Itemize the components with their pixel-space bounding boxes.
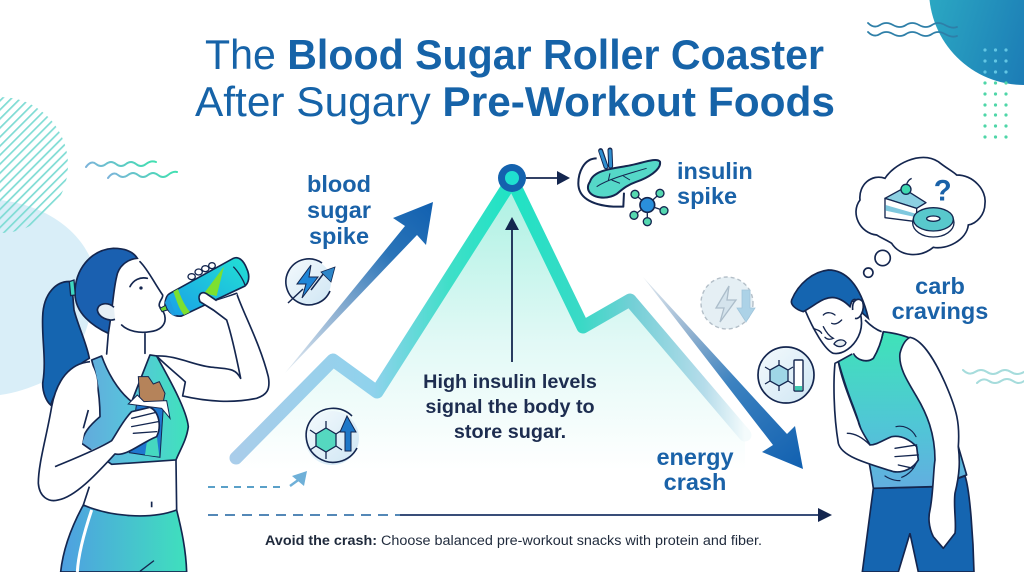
icon: hexagon with up arrow <box>305 408 359 465</box>
right arm <box>900 337 959 548</box>
eye <box>130 278 147 290</box>
head <box>805 296 861 354</box>
label: blood sugar spike: spike <box>309 223 369 249</box>
raised arm <box>157 293 269 401</box>
chocolate bar <box>128 377 170 457</box>
label: insulin spike: spike <box>677 183 737 209</box>
title: The Blood Sugar Roller Coaster <box>205 31 824 78</box>
decorative waves left <box>86 161 177 178</box>
title: After Sugary Pre-Workout Foods <box>195 78 835 125</box>
left arm and hand <box>38 362 159 501</box>
label: blood sugar spike: sugar <box>307 197 371 223</box>
left arm and hand <box>834 362 918 472</box>
icon: hexagon with low battery <box>758 347 814 403</box>
vertical arrow from text to peak <box>505 217 519 362</box>
dashed arrow upper <box>208 471 307 487</box>
finger lines <box>132 413 158 433</box>
glucose curve line <box>236 180 745 458</box>
waist lines <box>83 460 177 510</box>
hair <box>75 248 137 333</box>
dot grid top right <box>983 48 1008 139</box>
decorative waves top right <box>868 23 957 37</box>
hair <box>791 270 868 318</box>
pants <box>862 476 974 572</box>
blood sugar spike arrow <box>285 202 433 373</box>
icon: cake <box>885 178 926 222</box>
tank top <box>838 332 967 488</box>
timeline arrow lower <box>208 508 832 522</box>
label: energy crash: energy <box>656 444 734 470</box>
background blob: pale blue <box>0 200 94 395</box>
peak node <box>498 164 526 192</box>
figure: man with stomach ache and thought bubble <box>791 157 985 572</box>
background striped circle <box>0 97 68 233</box>
label: carb cravings: cravings <box>892 298 988 324</box>
ponytail <box>43 282 89 405</box>
ear <box>97 304 115 320</box>
icon: donut <box>913 208 954 237</box>
icon: pancreas and insulin molecule <box>578 150 668 226</box>
top-right gradient circle <box>929 0 1024 85</box>
label: insulin spike: insulin <box>677 158 753 184</box>
glucose curve area fill <box>236 180 745 480</box>
explanation text: High insulin levels <box>423 371 597 393</box>
arrow to pancreas <box>526 171 570 185</box>
explanation text: store sugar. <box>454 421 566 443</box>
thought cloud <box>856 157 985 277</box>
title <box>195 31 835 125</box>
icon: bolt with up arrow <box>285 259 335 305</box>
explanation text: signal the body to <box>425 396 595 418</box>
left arm outlines <box>38 362 159 501</box>
energy crash arrow <box>643 277 803 469</box>
ear <box>853 299 863 318</box>
decorative waves right <box>963 370 1024 383</box>
icon: faded bolt with down arrow <box>701 277 755 329</box>
torso <box>83 330 187 510</box>
neck lines <box>853 320 883 361</box>
label: carb cravings: carb <box>915 273 965 299</box>
figure: woman drinking <box>38 248 269 572</box>
question mark: ? <box>934 175 952 208</box>
label: blood sugar spike: blood <box>307 171 371 197</box>
neck and face <box>107 261 165 369</box>
stomach ache lines <box>885 426 917 481</box>
footer tip: Avoid the crash: Choose balanced pre-workout snacks with protein and fiber. <box>265 533 762 548</box>
sports bra <box>82 355 188 464</box>
hair tie <box>69 280 75 296</box>
bottle <box>160 258 249 320</box>
label: energy crash: crash <box>664 469 726 495</box>
neck <box>847 317 882 361</box>
arm crease and finger lines <box>847 433 918 468</box>
facial features <box>813 313 846 347</box>
shorts <box>61 505 187 572</box>
